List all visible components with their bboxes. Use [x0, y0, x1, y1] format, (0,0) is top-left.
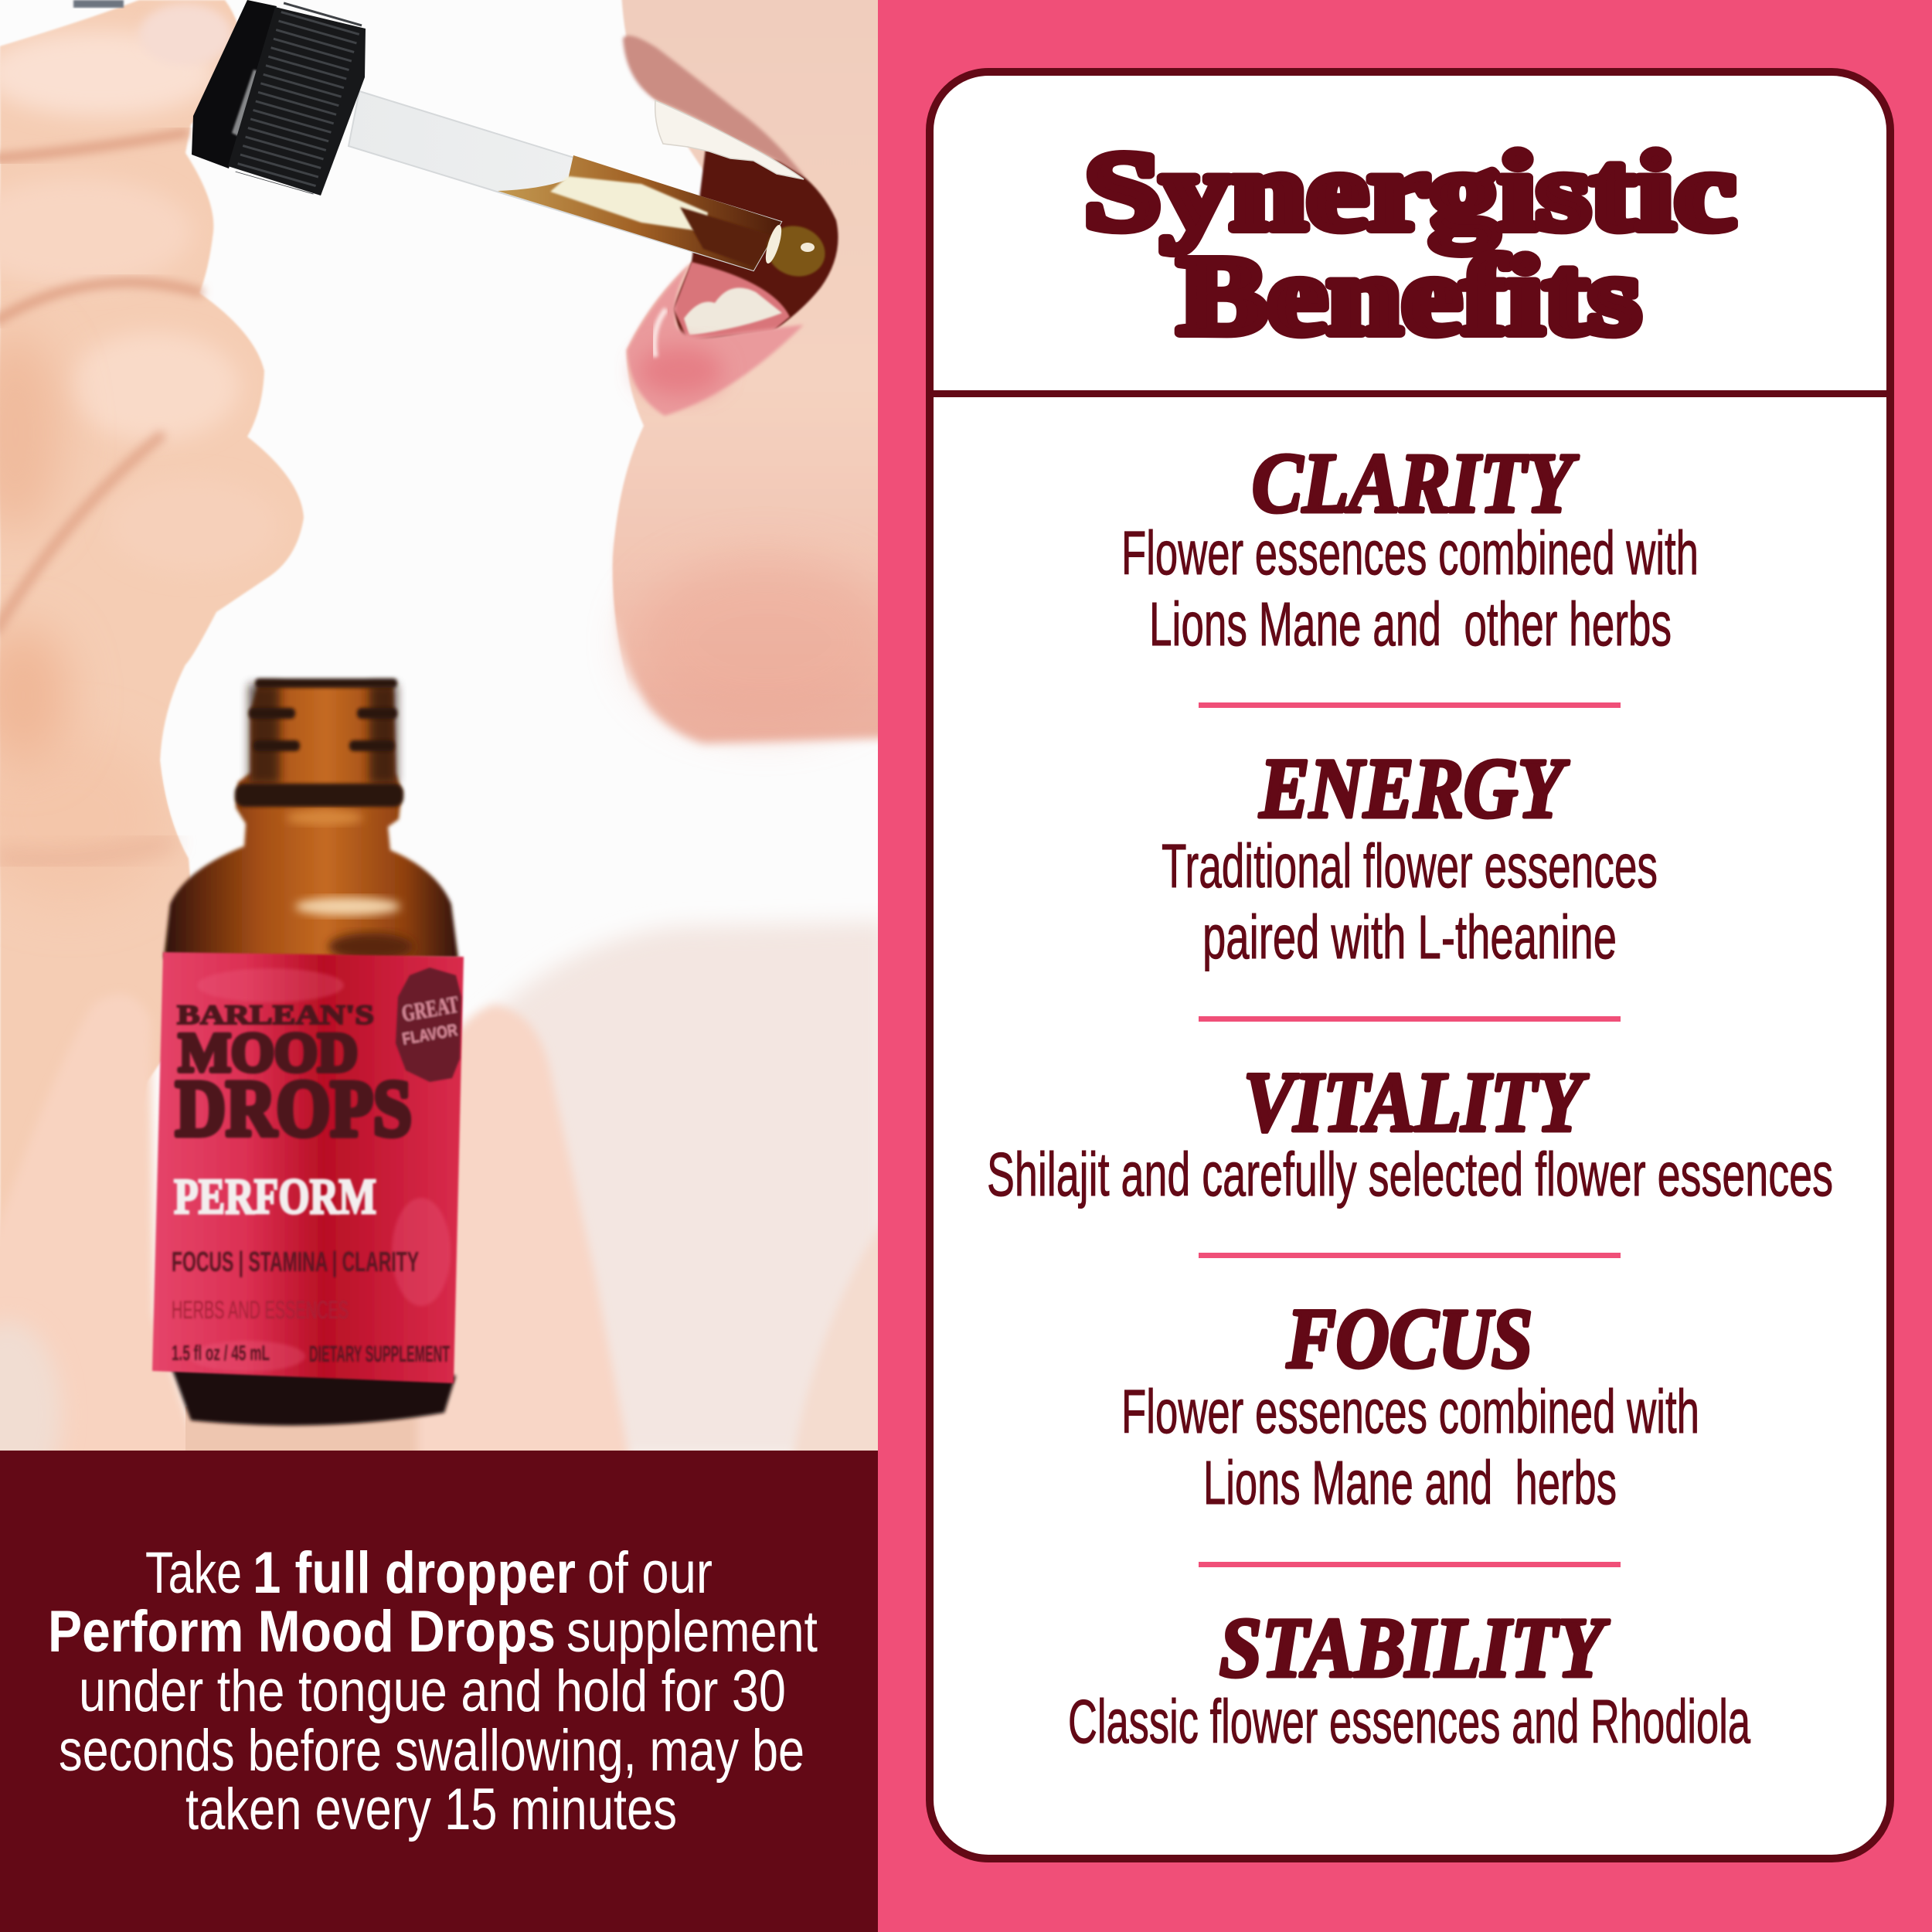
shirt [501, 917, 878, 1451]
benefit: energy: paired with L-theanine [1202, 903, 1617, 971]
rule [1199, 702, 1621, 708]
label [152, 952, 464, 1383]
label text: PERFORM [174, 1168, 376, 1225]
lower lip [627, 262, 804, 416]
line 1 [145, 1540, 713, 1606]
benefit: clarity: Lions Mane and other herbs [1149, 590, 1672, 658]
benefit: focus [1121, 1291, 1699, 1517]
tip shine [763, 223, 784, 265]
label text: BARLEAN'S [177, 999, 374, 1030]
rule [1199, 1253, 1621, 1258]
item behind thumb [73, 0, 124, 8]
bottle [152, 679, 464, 1426]
dropper tip [760, 219, 832, 284]
dark refraction [328, 933, 413, 961]
neck threads [235, 679, 403, 807]
shoulder skin [793, 1227, 878, 1451]
right thumb behind bottle [417, 1005, 630, 1461]
benefit: energy [1162, 741, 1658, 971]
label text: 1.5 fl oz / 45 mL [172, 1341, 270, 1365]
upper teeth [655, 100, 804, 179]
upper hand and wrist [0, 0, 304, 1451]
rule [1199, 1016, 1621, 1022]
label text: HERBS AND ESSENCES [172, 1296, 349, 1324]
lower teeth [684, 287, 782, 335]
line 1: of our [587, 1540, 713, 1606]
lower hand left finger [0, 994, 202, 1461]
benefit: energy: ENERGY [1259, 741, 1570, 835]
flavor badge [396, 968, 461, 1082]
line 3: under the tongue and hold for 30 [79, 1658, 786, 1724]
lower mouth pink [674, 262, 790, 340]
cap ribs [274, 13, 323, 183]
ribbed cap [228, 7, 366, 196]
glass pipette [349, 91, 781, 270]
benefit: stability [1068, 1600, 1750, 1756]
header divider [930, 390, 1890, 397]
line 1: Take [145, 1540, 242, 1606]
amber glass [164, 682, 458, 958]
glass highlights [295, 897, 400, 916]
benefit: focus: FOCUS [1286, 1291, 1532, 1386]
title: Benefits [1178, 234, 1641, 358]
finger creases [0, 133, 199, 859]
thumb nail [139, 4, 232, 66]
lip highlight [655, 309, 666, 357]
chin blush [615, 558, 878, 685]
benefit: vitality [987, 1055, 1833, 1209]
label text: DIETARY SUPPLEMENT [309, 1342, 450, 1367]
collar shine [232, 70, 266, 139]
label text: MOOD [179, 1022, 358, 1083]
chin [612, 597, 878, 750]
line 5: taken every 15 minutes [185, 1777, 677, 1842]
skin under bottle [185, 1406, 471, 1453]
benefit: clarity: CLARITY [1252, 436, 1579, 530]
label text: DROPS [175, 1064, 412, 1153]
benefit: stability: STABILITY [1219, 1600, 1610, 1695]
bottle base [172, 1368, 456, 1426]
lip colour [638, 346, 723, 396]
title [1084, 130, 1736, 358]
corner pale [0, 1321, 62, 1507]
label text [172, 999, 450, 1367]
line 2: Perform Mood Drops [48, 1599, 556, 1665]
title: Synergistic [1084, 130, 1736, 253]
benefit: focus: Lions Mane and herbs [1203, 1448, 1617, 1517]
dark reflection [680, 207, 773, 267]
flavor badge: GREAT [400, 991, 461, 1027]
photo: woman taking dropper with bottle [0, 0, 896, 1507]
benefit: clarity [1121, 436, 1699, 658]
benefit: vitality: VITALITY [1243, 1055, 1589, 1149]
dropper [192, 0, 832, 284]
rule [1199, 1562, 1621, 1567]
line 2: supplement [566, 1599, 818, 1665]
face [613, 0, 889, 696]
instruction panel [0, 1451, 878, 1932]
benefit: energy: Traditional flower essences [1162, 832, 1658, 900]
panel: benefits card [930, 72, 1890, 1859]
tip glint [801, 243, 815, 252]
line 4: seconds before swallowing, may be [59, 1718, 804, 1784]
cream reflection [550, 176, 708, 232]
upper lip [623, 36, 805, 178]
label ornament [189, 968, 451, 1372]
line 1: 1 full dropper [253, 1540, 576, 1606]
collar [192, 0, 277, 168]
neck dark sides [249, 684, 397, 784]
flavor badge: FLAVOR [401, 1020, 459, 1049]
hand shading [0, 31, 278, 904]
liquid in pipette [498, 155, 781, 270]
label text: FOCUS | STAMINA | CLARITY [172, 1246, 419, 1278]
mouth interior [672, 148, 838, 344]
